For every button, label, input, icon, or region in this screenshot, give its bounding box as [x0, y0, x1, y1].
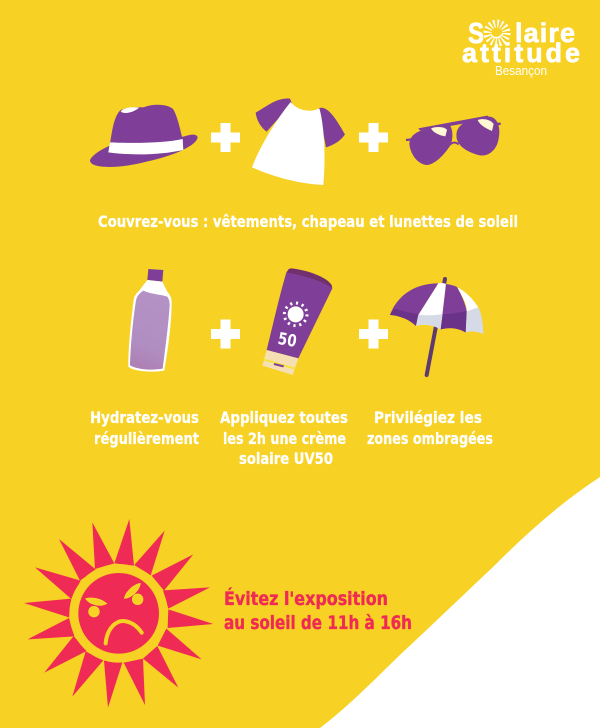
logo: Solaire Attitude Besançon: laire [515, 18, 575, 48]
white corner curve [320, 477, 600, 728]
icon: sunglasses [406, 116, 501, 165]
text: apply sunscreen: solaire UV50 [239, 449, 333, 468]
icon: water bottle [128, 269, 172, 372]
text: apply sunscreen: Appliquez toutes [220, 408, 348, 427]
logo: Solaire Attitude Besançon: attitude [462, 38, 580, 68]
icon: t-shirt [252, 99, 345, 185]
heading: cover up: Couvrez-vous : vêtements, chapeau et lunettes de soleil [98, 212, 518, 231]
text: shade: zones ombragées [367, 429, 493, 448]
text: apply sunscreen [220, 408, 348, 468]
icon: angry sun [24, 519, 213, 708]
text: shade: Privilégiez les [374, 408, 482, 427]
icon: plus [211, 320, 240, 348]
logo: Solaire Attitude Besançon: S [468, 18, 484, 50]
icon: parasol [390, 279, 483, 375]
icon: plus [359, 320, 388, 348]
logo: Solaire Attitude Besançon [462, 18, 580, 78]
warning text: Évitez l'exposition [224, 587, 388, 610]
text: hydrate: Hydratez-vous [90, 408, 199, 427]
icon: sunscreen tube: 50 [276, 329, 298, 351]
warning text [224, 587, 412, 634]
icon: plus [211, 123, 240, 152]
text: shade [367, 408, 493, 448]
text: hydrate [90, 408, 199, 448]
icon: hat [90, 105, 198, 167]
warning text: au soleil de 11h à 16h [224, 612, 412, 634]
text: apply sunscreen: les 2h une crème [223, 429, 346, 448]
logo: Solaire Attitude Besançon: Besançon [495, 63, 547, 78]
icon: plus [359, 123, 388, 152]
icon: sunscreen tube [262, 268, 332, 375]
text: hydrate: régulièrement [94, 429, 199, 448]
